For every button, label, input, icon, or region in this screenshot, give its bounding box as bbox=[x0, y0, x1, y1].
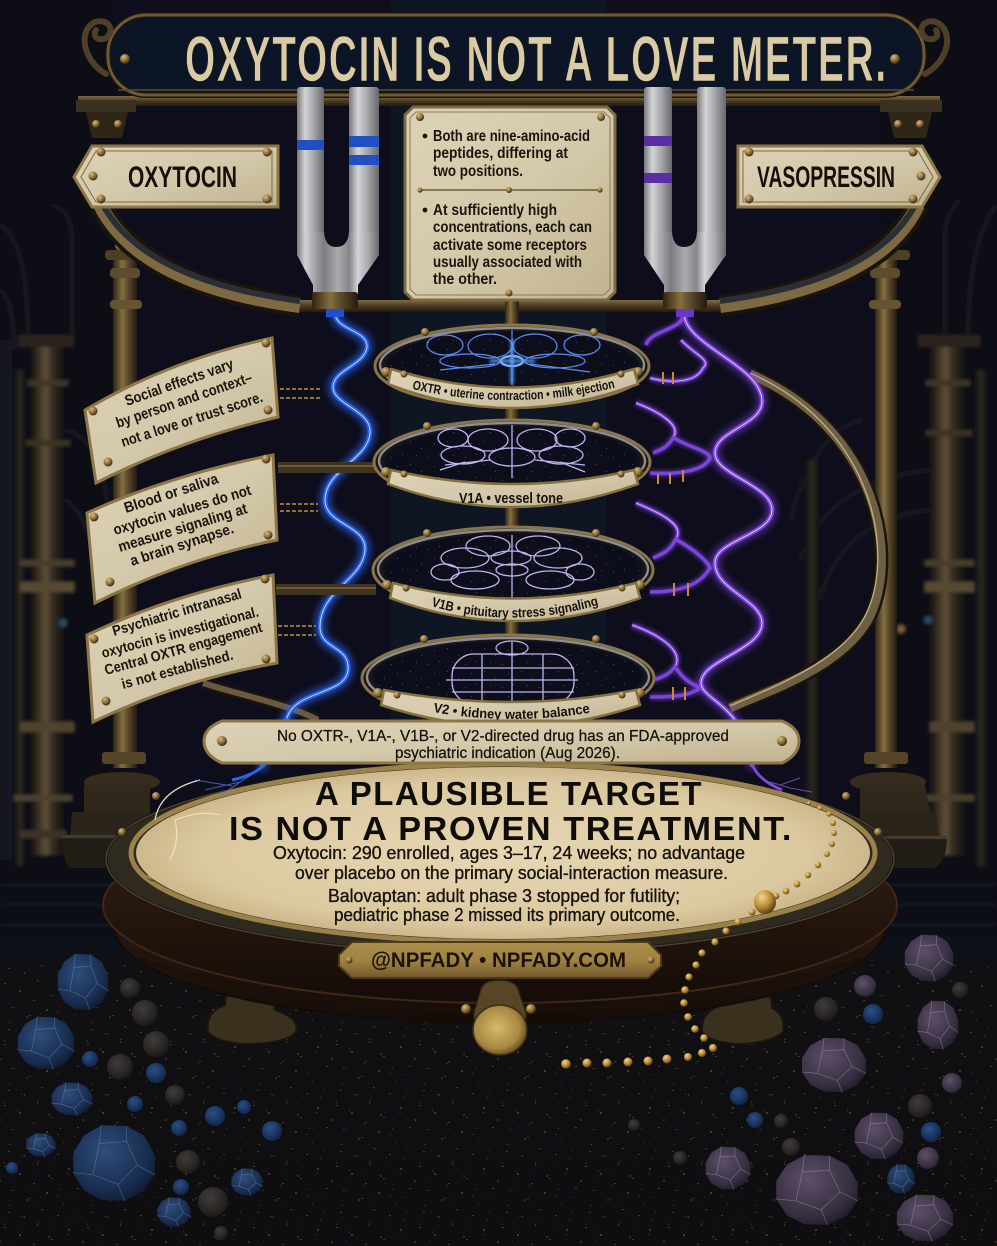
left support column bbox=[62, 238, 160, 868]
fact two: the other. bbox=[433, 271, 497, 288]
receptor: V2: V2 • kidney water balance bbox=[434, 702, 590, 720]
oxytocin wire bbox=[262, 313, 370, 766]
side card: intranasal oxytocin: is not established. bbox=[120, 648, 235, 693]
side card: social effects: Social effects vary bbox=[123, 356, 236, 410]
fact two: At sufficiently high bbox=[433, 202, 557, 219]
side card: blood or saliva bbox=[87, 454, 277, 603]
side card: social effects bbox=[85, 338, 278, 483]
ornament scrolls bbox=[85, 21, 947, 74]
side card: social effects: by person and context– bbox=[114, 369, 255, 432]
nameplate: vasopressin bbox=[738, 146, 940, 207]
trial evidence text: pediatric phase 2 missed its primary outcome. bbox=[334, 905, 680, 925]
side card: intranasal oxytocin: oxytocin is investigational. bbox=[100, 604, 261, 662]
tuning fork: oxytocin bbox=[297, 87, 379, 317]
receptor: OXTR bbox=[374, 324, 650, 410]
side card: blood or saliva: Blood or saliva bbox=[122, 470, 221, 517]
notice bar: FDA status bbox=[204, 721, 799, 763]
conclusion heading: IS NOT A PROVEN TREATMENT. bbox=[229, 810, 793, 847]
nameplate: vasopressin: VASOPRESSIN bbox=[757, 161, 895, 194]
brass knob bbox=[461, 980, 536, 1055]
fact two: usually associated with bbox=[433, 254, 582, 271]
notice bar: FDA status: No OXTR-, V1A-, V1B-, or V2-directed drug has an FDA-approved bbox=[277, 728, 729, 745]
secondary violet branches behind receptors bbox=[632, 313, 710, 697]
banner OXTR bbox=[388, 369, 638, 408]
fact two bbox=[423, 202, 592, 288]
vasopressin wire main bbox=[684, 313, 772, 765]
side card: intranasal oxytocin: Psychiatric intranasal bbox=[111, 586, 244, 640]
collar bbox=[663, 292, 707, 309]
conclusion heading bbox=[229, 775, 793, 847]
handle nameplate: @NPFADY • NPFADY.COM bbox=[371, 949, 626, 972]
trial evidence text: Oxytocin: 290 enrolled, ages 3–17, 24 weeks; no advantage bbox=[273, 843, 745, 863]
receptor: V1B bbox=[372, 526, 654, 622]
pedestal: bronze rim bbox=[106, 764, 894, 954]
lattice V1B bbox=[431, 535, 594, 600]
right support column bbox=[850, 238, 947, 868]
title banner bbox=[85, 15, 947, 95]
banner V2 bbox=[381, 690, 640, 726]
side card: blood or saliva: measure signaling at bbox=[116, 500, 249, 556]
side card: blood or saliva: oxytocin values do not bbox=[111, 482, 253, 539]
side card: social effects: not a love or trust score. bbox=[119, 389, 265, 451]
conclusion heading: A PLAUSIBLE TARGET bbox=[315, 775, 703, 812]
fact one: peptides, differing at bbox=[433, 145, 568, 162]
feet under pedestal bbox=[208, 982, 784, 1044]
fact one: Both are nine-amino-acid bbox=[433, 128, 590, 145]
top horizontal bar and brackets bbox=[76, 96, 942, 940]
receptor: V1A bbox=[374, 420, 650, 507]
fact one: two positions. bbox=[433, 163, 523, 180]
center panel: shared peptide facts bbox=[405, 107, 615, 300]
pedestal: wooden base bbox=[103, 807, 897, 1023]
lattice V1A bbox=[438, 425, 585, 478]
receptor: V2 bbox=[360, 634, 656, 720]
receptor: OXTR: OXTR • uterine contraction • milk ejection bbox=[413, 380, 614, 400]
gems: sapphire pile left bbox=[6, 954, 282, 1240]
nameplate: oxytocin bbox=[74, 146, 278, 207]
bead chain bbox=[561, 801, 837, 1069]
banner V1A bbox=[388, 470, 638, 507]
receptor: V1A: V1A • vessel tone bbox=[459, 491, 563, 507]
lightning roots bbox=[195, 768, 262, 795]
notice bar: FDA status: psychiatric indication (Aug 2026). bbox=[395, 745, 620, 762]
tuning fork: vasopressin bbox=[644, 87, 726, 317]
side card: blood or saliva: a brain synapse. bbox=[128, 520, 236, 570]
fact two: activate some receptors bbox=[433, 237, 587, 254]
receptor: V1B: V1B • pituitary stress signaling bbox=[434, 597, 598, 620]
parchment disc with conclusion bbox=[136, 764, 870, 939]
collar bbox=[312, 292, 358, 309]
handle nameplate bbox=[339, 942, 661, 978]
connector rods from cards bbox=[276, 372, 688, 700]
side card: intranasal oxytocin: Central OXTR engagement bbox=[103, 620, 264, 679]
nameplate: oxytocin: OXYTOCIN bbox=[128, 161, 237, 194]
trial evidence text: over placebo on the primary social-interaction measure. bbox=[295, 863, 728, 883]
fact two: concentrations, each can bbox=[433, 219, 592, 236]
banner V1B bbox=[390, 583, 640, 621]
lattice OXTR bbox=[427, 330, 600, 385]
side card: intranasal oxytocin bbox=[87, 574, 277, 722]
lattice V2 bbox=[446, 641, 578, 706]
trial evidence text: Balovaptan: adult phase 3 stopped for futility; bbox=[328, 886, 680, 906]
gems: amethyst pile right bbox=[628, 935, 968, 1241]
trial evidence text bbox=[273, 843, 745, 925]
curved brass frame arms bbox=[100, 205, 918, 720]
floor with speckled ground bbox=[0, 935, 997, 1246]
fact one bbox=[423, 128, 590, 180]
